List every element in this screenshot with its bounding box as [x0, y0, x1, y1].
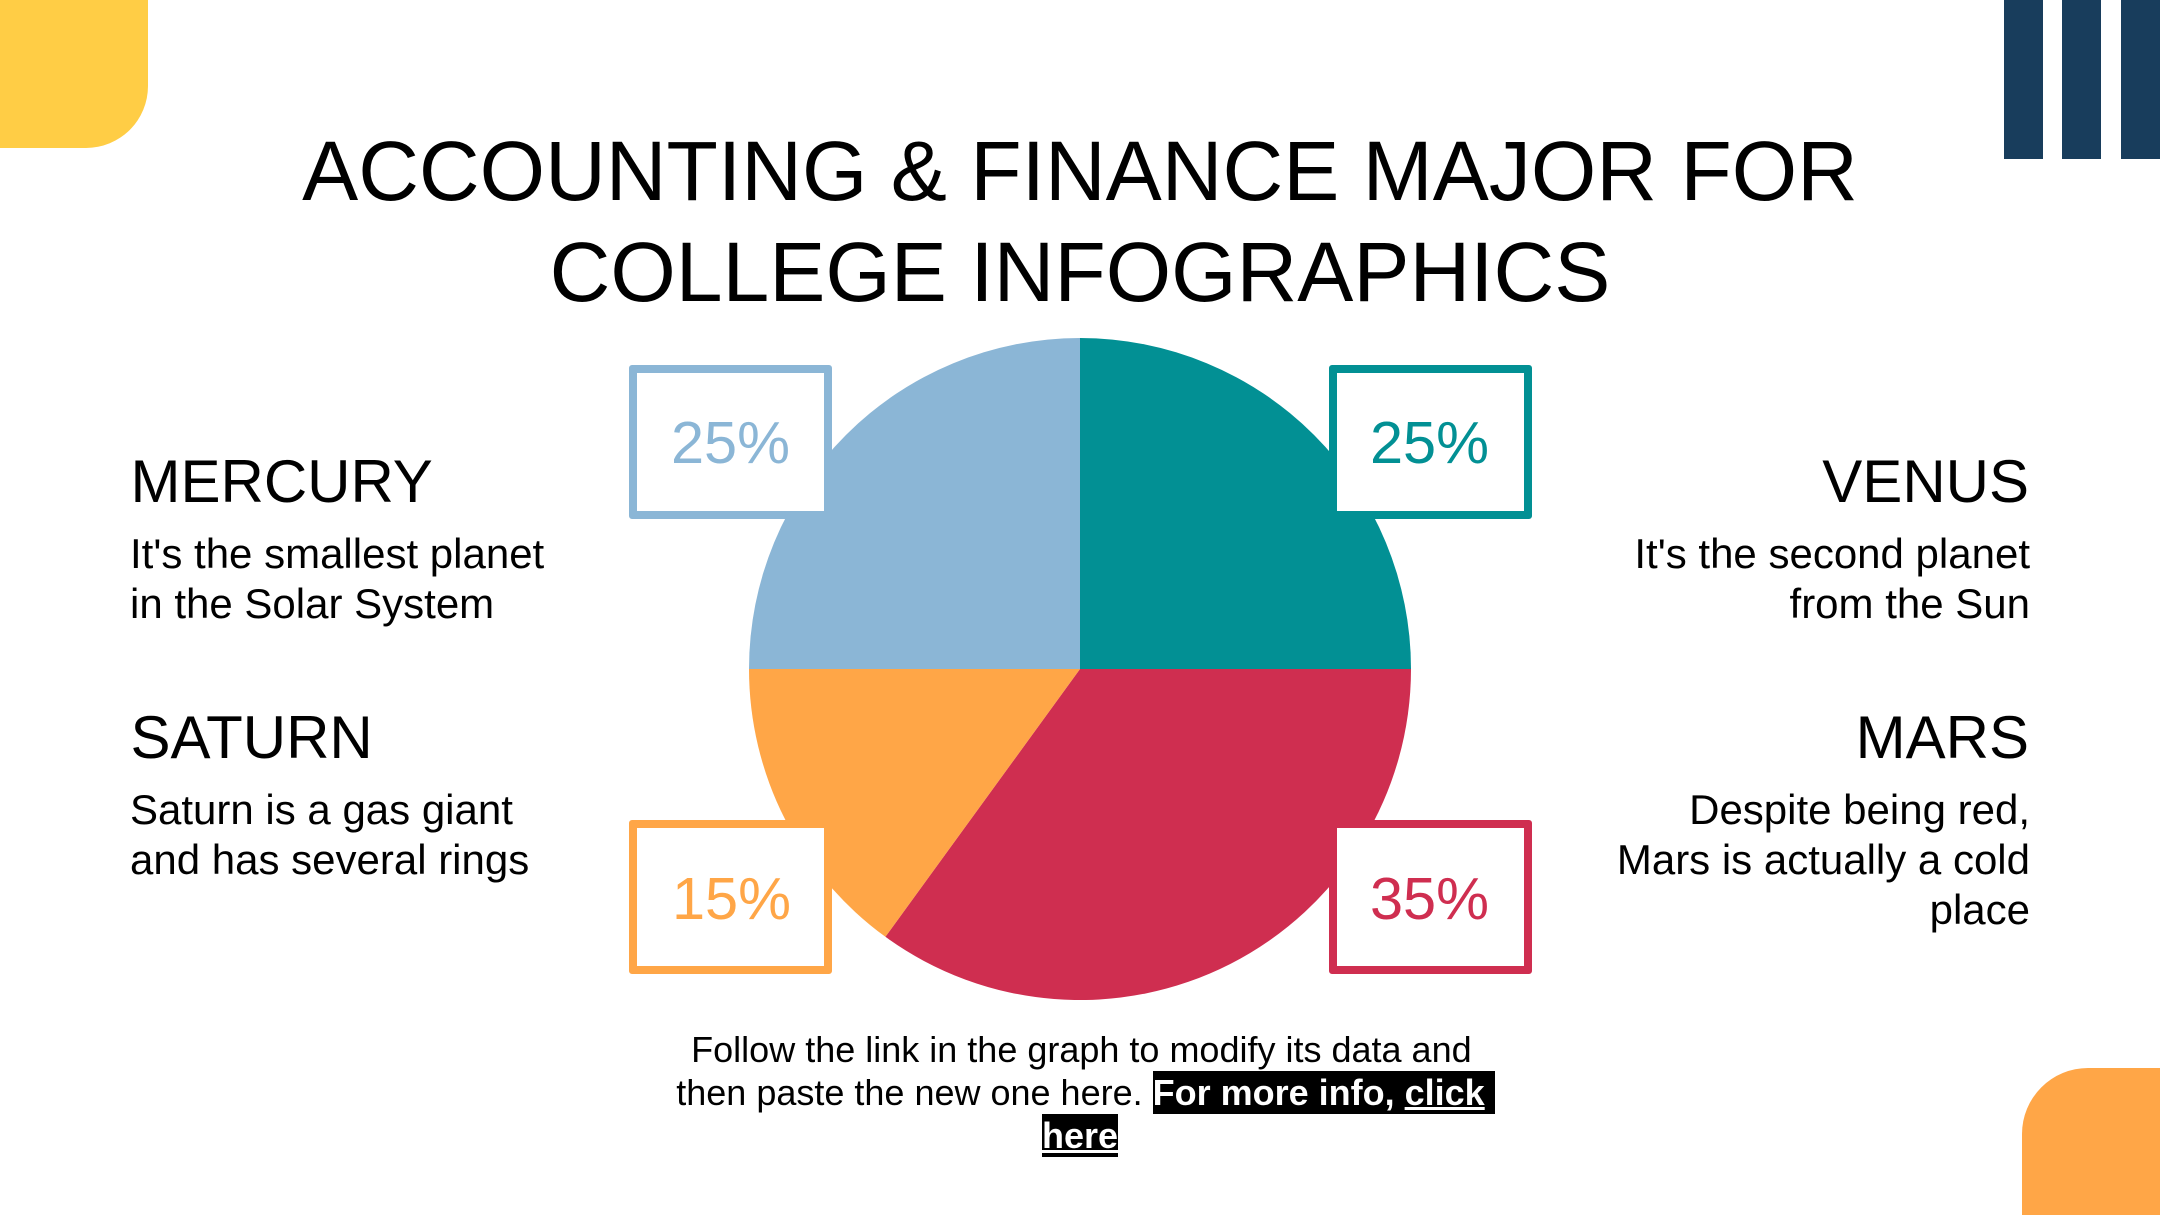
- value box: Saturn 15%: [629, 820, 832, 974]
- text: Venus description: from the Sun: [1790, 580, 2030, 627]
- heading: Saturn: SATURN: [130, 704, 373, 771]
- value box: Mercury 25%: 25%: [671, 409, 790, 476]
- footer note with highlighted link: For more info, click: [1153, 1072, 1485, 1113]
- heading: Mercury: MERCURY: [130, 448, 433, 515]
- footer note with highlighted link: [676, 1029, 1495, 1157]
- value box: Venus 25%: [1329, 365, 1532, 519]
- text: Saturn description: and has several rings: [130, 836, 529, 883]
- text: Venus description: [1634, 530, 2030, 627]
- value box: Mercury 25%: [629, 365, 832, 519]
- heading: Mars: MARS: [1856, 704, 2029, 771]
- title: [302, 124, 1858, 318]
- slice: Mercury 25%: [749, 338, 1080, 669]
- text: Mars description: Mars is actually a cold: [1617, 836, 2030, 883]
- footer note with highlighted link: here: [1042, 1115, 1118, 1156]
- text: Mercury description: in the Solar System: [130, 580, 494, 627]
- text: Mercury description: It's the smallest planet: [130, 530, 544, 577]
- value box: Saturn 15%: 15%: [672, 865, 791, 932]
- text: Mercury description: [130, 530, 544, 627]
- pie chart: [749, 338, 1411, 1000]
- heading: Venus: VENUS: [1822, 448, 2029, 515]
- footer note with highlighted link: then paste the new one here.: [676, 1072, 1143, 1113]
- title: ACCOUNTING & FINANCE MAJOR FOR: [302, 124, 1858, 218]
- value box: Mars 35%: 35%: [1370, 865, 1489, 932]
- decoration: navy bars: [2004, 0, 2160, 159]
- text: Mars description: place: [1930, 886, 2030, 933]
- title: COLLEGE INFOGRAPHICS: [550, 224, 1610, 318]
- value box: Mars 35%: [1329, 820, 1532, 974]
- text: Mars description: [1617, 786, 2030, 933]
- text: Saturn description: Saturn is a gas giant: [130, 786, 513, 833]
- slice: Venus 25%: [1080, 338, 1411, 669]
- footer note with highlighted link: Follow the link in the graph to modify its data and: [691, 1029, 1472, 1070]
- decoration: yellow corner shape: [0, 0, 148, 148]
- text: Venus description: It's the second planet: [1634, 530, 2030, 577]
- value box: Venus 25%: 25%: [1370, 409, 1489, 476]
- slice: Mars 35%: [885, 669, 1411, 1000]
- text: Mars description: Despite being red,: [1689, 786, 2030, 833]
- slice: Saturn 15%: [749, 669, 1080, 937]
- decoration: orange corner shape: [2022, 1068, 2160, 1215]
- text: Saturn description: [130, 786, 529, 883]
